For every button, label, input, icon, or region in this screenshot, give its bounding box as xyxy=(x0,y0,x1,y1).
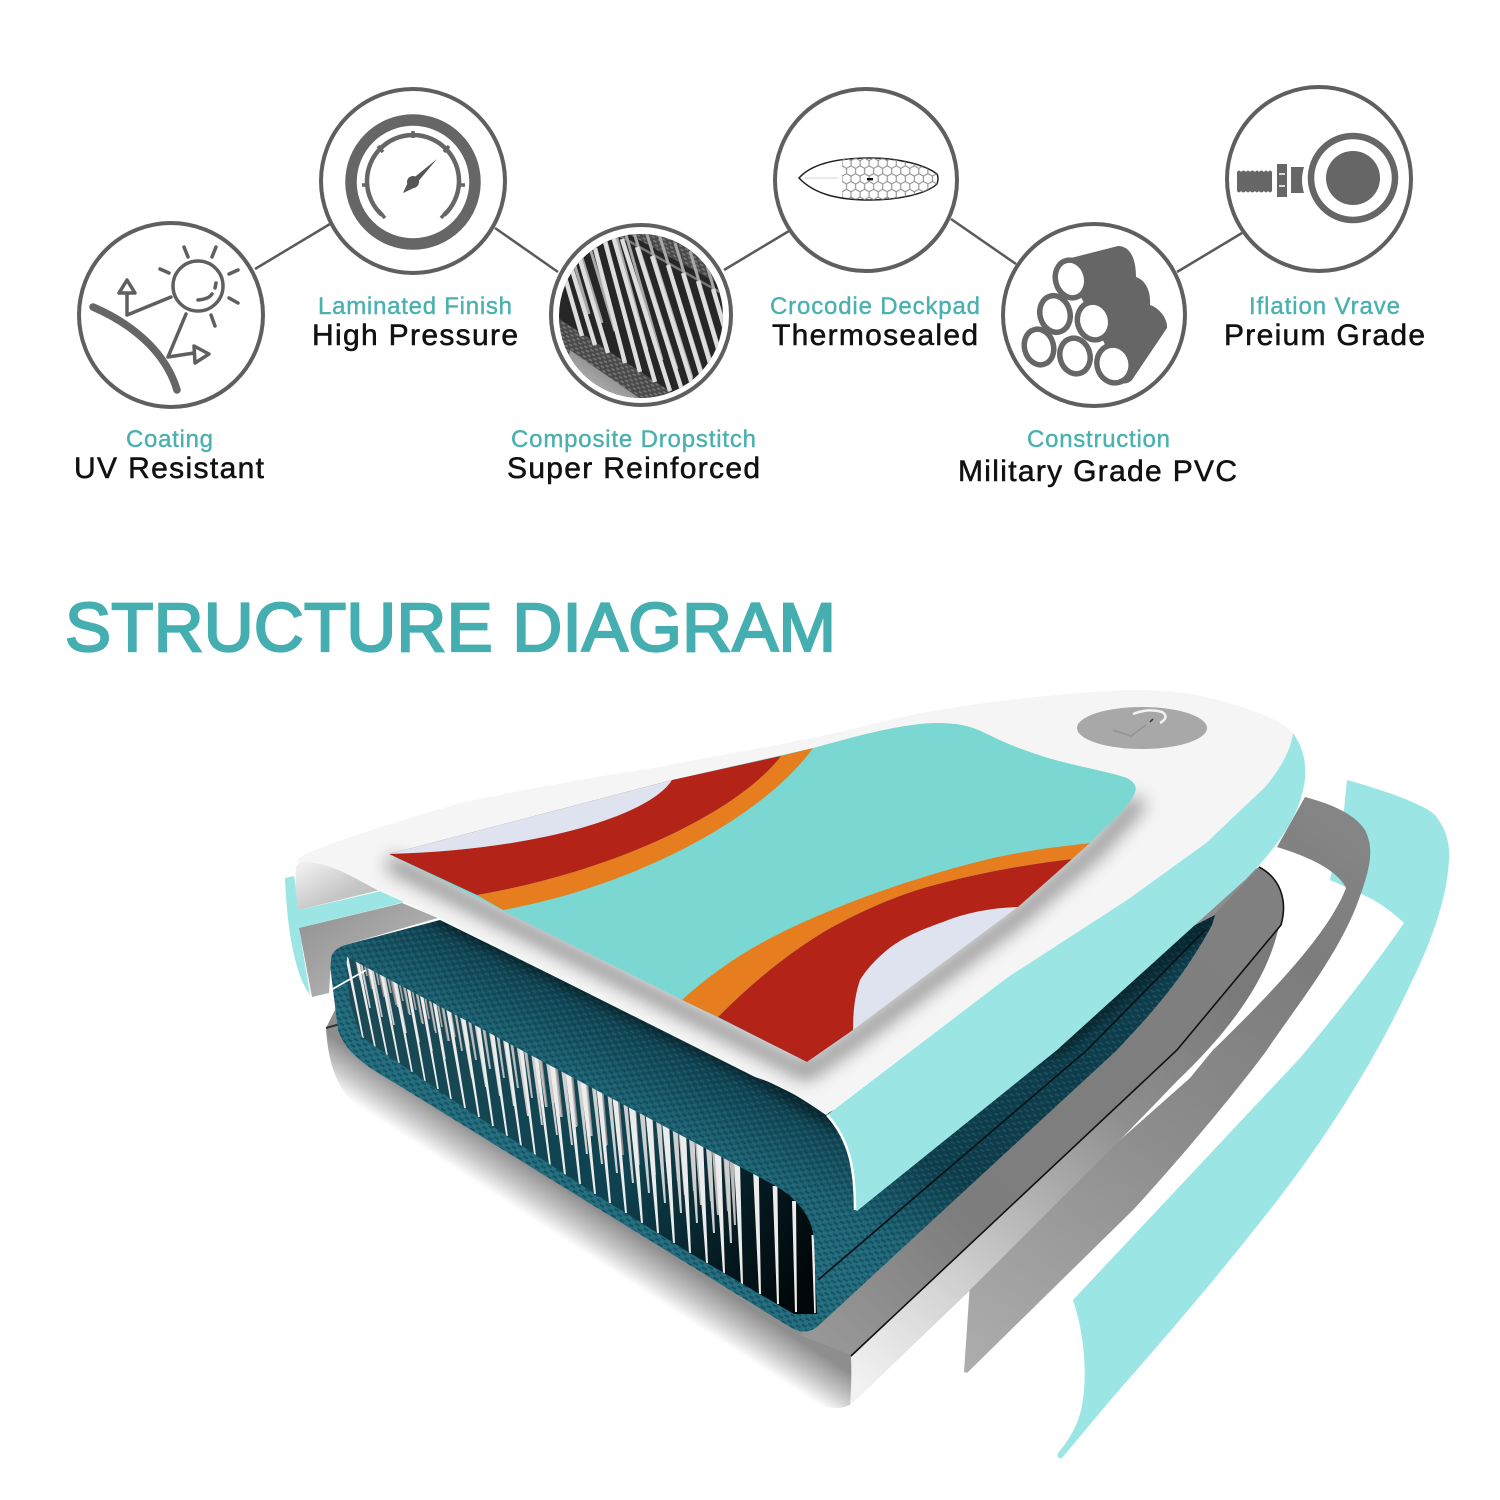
label: UV Resistant Coating xyxy=(74,426,265,485)
label: Preium Grade Iflation Vrave: Iflation Vrave xyxy=(1249,293,1400,320)
grey rail strip xyxy=(964,797,1370,1373)
deck pad stripes: red upper xyxy=(389,756,781,895)
icon: pressure gauge xyxy=(321,89,505,273)
label: Super Reinforced Composite Dropstitch: Composite Dropstitch xyxy=(511,426,756,453)
label: Military Grade PVC Construction: Military Grade PVC xyxy=(958,455,1237,488)
label: Thermosealed Crocodie Deckpad: Crocodie Deckpad xyxy=(770,293,980,320)
connector lines between icons xyxy=(255,219,1242,272)
label: Military Grade PVC Construction: Construction xyxy=(1027,426,1170,453)
left rail cut ends xyxy=(285,862,438,997)
deck pad stripes: red lower xyxy=(718,859,1073,1062)
label: High Pressure Laminated Finish xyxy=(312,293,518,352)
label: Preium Grade Iflation Vrave: Preium Grade xyxy=(1224,319,1425,352)
deck pad stripes: orange lower xyxy=(682,843,1092,1017)
title: STRUCTURE DIAGRAM xyxy=(65,589,836,666)
outer teal rail strip xyxy=(1058,780,1449,1458)
icon: tube construction xyxy=(1003,224,1185,406)
board exploded diagram xyxy=(285,690,1449,1458)
label: High Pressure Laminated Finish: High Pressure xyxy=(312,319,518,352)
icon: dropstitch photo xyxy=(549,223,733,407)
deck pad stripes: lavender upper xyxy=(389,780,672,854)
label: High Pressure Laminated Finish: Laminated Finish xyxy=(318,293,512,320)
deck pad stripes: lavender lower xyxy=(853,907,1018,1032)
label: Thermosealed Crocodie Deckpad xyxy=(770,293,980,352)
label: UV Resistant Coating: UV Resistant xyxy=(74,452,265,485)
label: Preium Grade Iflation Vrave xyxy=(1224,293,1425,352)
white top deck xyxy=(297,690,1293,1115)
label: Super Reinforced Composite Dropstitch: Super Reinforced xyxy=(507,452,760,485)
bottom sheet xyxy=(326,867,1283,1408)
label: Thermosealed Crocodie Deckpad: Thermosealed xyxy=(772,319,978,352)
label: UV Resistant Coating: Coating xyxy=(126,426,213,453)
deck pad xyxy=(385,720,1140,1065)
dropstitch core fabric xyxy=(329,912,1215,1332)
D-ring plate xyxy=(1077,707,1207,749)
deck pad stripes: orange upper xyxy=(477,748,813,910)
label: Military Grade PVC Construction xyxy=(958,426,1237,488)
icon: UV coating xyxy=(79,223,263,407)
icon: board with hexagon deckpad xyxy=(775,89,957,271)
dropstitch needles xyxy=(346,957,817,1314)
label: Super Reinforced Composite Dropstitch xyxy=(507,426,760,485)
icon: inflation valve xyxy=(1227,87,1411,271)
teal rim of top deck xyxy=(827,733,1305,1211)
